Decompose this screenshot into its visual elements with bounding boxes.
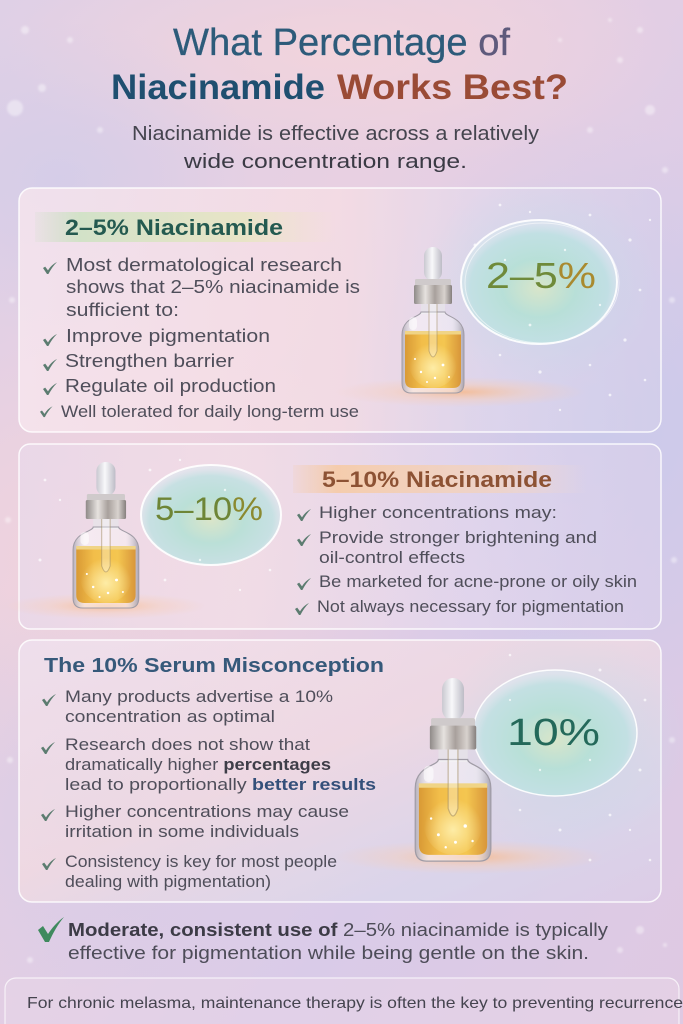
footer panel	[5, 978, 683, 1024]
checklist: 5–10%: Provide stronger brightening and	[319, 529, 597, 547]
checklist: misconception: lead to proportionally better results	[65, 776, 376, 794]
percentage orb: 10%	[432, 628, 683, 852]
title	[111, 22, 568, 107]
summary callout: effective for pigmentation while being gentle on the skin.	[68, 942, 589, 963]
title: Works Best?	[337, 68, 568, 107]
checklist: 5–10%	[295, 504, 637, 616]
panel: the 10% serum misconception	[19, 628, 683, 902]
checklist: misconception: Higher concentrations may cause	[65, 803, 349, 821]
panel: 2–5% niacinamide	[19, 178, 661, 432]
checklist: misconception: Consistency is key for most people	[65, 853, 337, 871]
checklist: 2–5%: shows that 2–5% niacinamide is	[66, 276, 360, 297]
checklist: misconception: irritation in some individuals	[65, 823, 299, 841]
checklist: 2–5%: Most dermatological research	[66, 254, 342, 275]
checklist: misconception: dealing with pigmentation)	[65, 873, 271, 891]
subtitle: Niacinamide is effective across a relatively	[132, 123, 539, 145]
footer panel: For chronic melasma, maintenance therapy is often the key to preventing recurrence	[27, 995, 683, 1012]
percentage orb: 2–5%	[422, 178, 658, 386]
checklist: 5–10%: Not always necessary for pigmentation	[317, 598, 624, 616]
checklist: misconception: Many products advertise a 10%	[65, 688, 333, 706]
checklist: misconception: concentration as optimal	[65, 708, 275, 726]
checklist: 5–10%: Be marketed for acne-prone or oily skin	[319, 573, 637, 591]
checklist: 2–5%	[40, 254, 360, 421]
heading band: 5–10%: 5–10% Niacinamide	[322, 467, 552, 492]
summary callout: Moderate, consistent use of 2–5% niacinamide is typically	[68, 919, 609, 940]
title: What Percentage of	[173, 22, 510, 64]
checklist: 2–5%: Strengthen barrier	[65, 350, 234, 371]
heading: misconception: The 10% Serum Misconception	[44, 654, 384, 677]
heading band: 2–5%	[35, 212, 335, 242]
sparkles	[38, 204, 651, 861]
percentage orb: 10%: 10%	[507, 712, 600, 754]
checklist: 5–10%: oil-control effects	[319, 549, 465, 567]
checklist: misconception: dramatically higher percentages	[65, 756, 331, 774]
heading band: 5–10%	[293, 465, 588, 493]
bottle: 2–5%	[335, 247, 585, 407]
panel: 5–10% niacinamide	[5, 444, 661, 629]
percentage orb: 5–10%	[141, 465, 281, 565]
checklist: 2–5%: Well tolerated for daily long-term use	[61, 403, 359, 421]
subtitle: wide concentration range.	[183, 151, 467, 173]
percentage orb: 2–5%: 2–5 %	[486, 255, 596, 296]
icon: large check	[38, 917, 64, 942]
heading band: 2–5%: 2–5% Niacinamide	[65, 215, 283, 240]
checklist: 5–10%: Higher concentrations may:	[319, 504, 557, 522]
checklist: 2–5%: sufficient to:	[66, 299, 179, 320]
checklist: 2–5%: Improve pigmentation	[66, 325, 270, 346]
checklist: misconception	[41, 688, 376, 891]
bottle: 5–10%	[5, 462, 205, 619]
checklist: 2–5%: Regulate oil production	[65, 375, 276, 396]
subtitle	[132, 123, 539, 173]
summary callout	[38, 917, 609, 963]
title: Niacinamide	[111, 68, 325, 107]
checklist: misconception: Research does not show that	[65, 736, 310, 754]
percentage orb: 5–10%: 5–10%	[155, 491, 263, 527]
bottle: 10%	[335, 678, 605, 874]
